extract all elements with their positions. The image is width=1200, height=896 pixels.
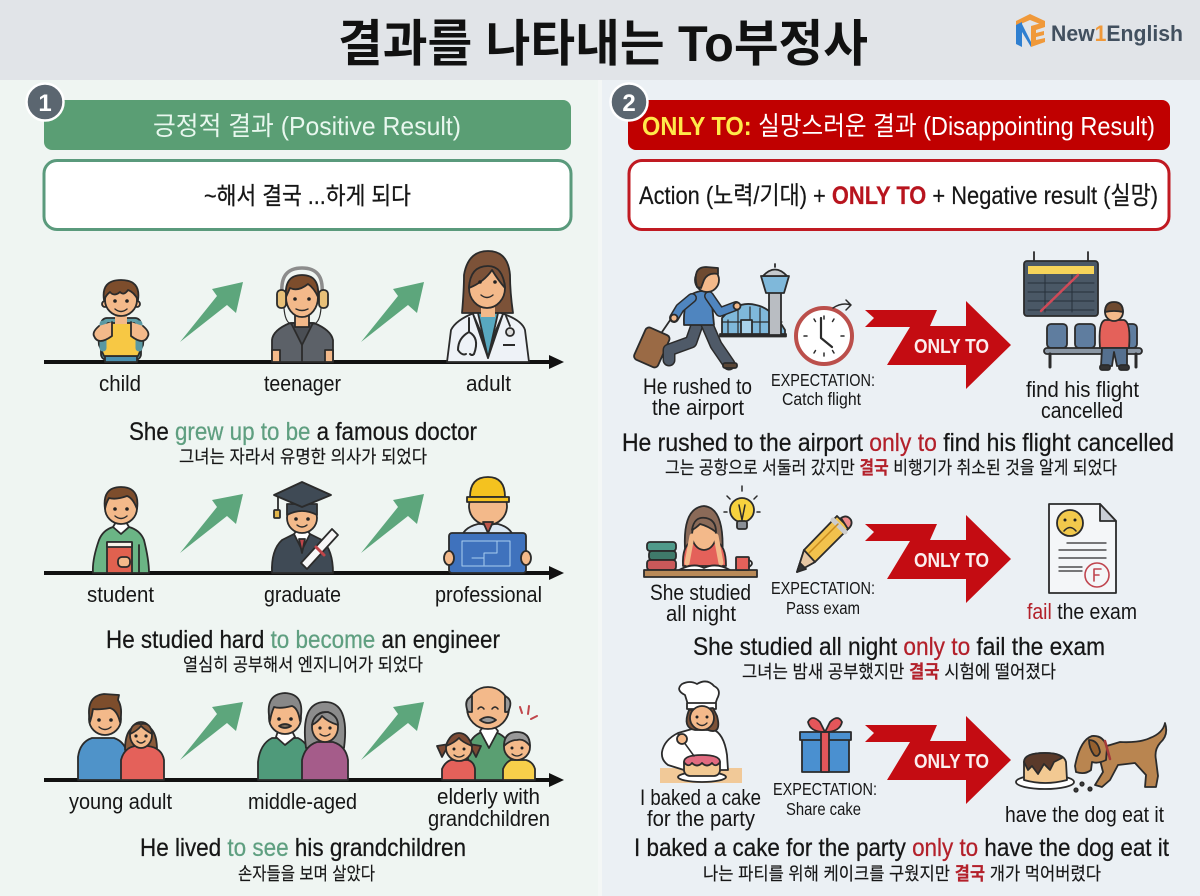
label: elderly with grandchildren [428, 784, 550, 831]
panel: positive result [26, 84, 571, 884]
expectation: pass exam [771, 578, 875, 618]
icon: young adult couple [78, 694, 164, 780]
caption: she studied all night: all night [666, 601, 736, 626]
title: 결과를 나타내는 To부정사 [338, 16, 868, 72]
red arrow: only to: ONLY TO [914, 336, 989, 358]
icon: middle-aged couple [258, 693, 348, 780]
label: adult: adult [466, 371, 511, 396]
label: elderly with grandchildren: elderly with [437, 784, 540, 809]
number badge 2: 2 [622, 90, 636, 117]
red arrow: only to [865, 515, 1011, 603]
caption: find his flight cancelled: find his flight [1026, 377, 1139, 402]
caption: find his flight cancelled: cancelled [1041, 398, 1123, 423]
korean translation 1: 그녀는 자라서 유명한 의사가 되었다 [179, 447, 427, 467]
panel: disappointing result [610, 84, 1174, 884]
caption: she studied all night [650, 580, 751, 626]
timeline 3 axis [44, 773, 564, 787]
icon: student studying at night [644, 486, 760, 577]
icon: dog eating cake [1016, 723, 1166, 792]
icon: graduate [272, 482, 338, 573]
label: elderly with grandchildren: grandchildren [428, 806, 550, 831]
timeline 1 axis [44, 355, 564, 369]
logo: New1English [1051, 21, 1183, 46]
label: student: student [87, 582, 154, 607]
label: child: child [99, 371, 141, 396]
icon: cancelled flight board and seats [1024, 252, 1142, 370]
caption: he rushed to the airport: He rushed to [643, 374, 752, 399]
expectation: catch flight: EXPECTATION: [771, 370, 875, 390]
panel heading bar: 긍정적 결과 (Positive Result) [153, 111, 461, 141]
number badge 1: 1 [38, 90, 52, 117]
label: middle-aged: middle-aged [248, 789, 357, 814]
green arrow [180, 702, 243, 760]
icon: clock [796, 300, 852, 364]
caption: i baked a cake for the party: I baked a cake [640, 785, 761, 810]
number badge 1 [26, 84, 64, 120]
caption: i baked a cake for the party: for the party [647, 806, 755, 831]
logo [1016, 14, 1183, 47]
example sentence 3: I baked a cake for the party only to have the dog eat it [634, 834, 1169, 862]
korean translation 1: 그는 공항으로 서둘러 갔지만 결국 비행기가 취소된 것을 알게 되었다 [665, 458, 1117, 478]
definition box: ~해서 결국 ...하게 되다 [204, 183, 411, 210]
caption: he rushed to the airport: the airport [652, 395, 744, 420]
green arrow [361, 282, 424, 342]
example sentence 3: He lived to see his grandchildren [140, 834, 466, 862]
caption: fail the exam: fail the exam [1027, 599, 1137, 624]
number badge 2 [610, 84, 648, 120]
icon: chef baking cake [660, 681, 742, 783]
formula box: Action (노력/기대) + ONLY TO + Negative result (실망) [639, 182, 1158, 210]
expectation: pass exam: EXPECTATION: [771, 578, 875, 598]
panel heading bar [628, 100, 1170, 150]
icon: teenager [272, 268, 333, 362]
caption: i baked a cake for the party [640, 785, 761, 831]
korean translation 2: 그녀는 밤새 공부했지만 결국 시험에 떨어졌다 [742, 662, 1056, 682]
expectation: pass exam: Pass exam [786, 598, 860, 618]
icon: elderly with grandchildren [437, 687, 537, 780]
icon: gift box [800, 718, 851, 772]
label: graduate: graduate [264, 582, 341, 607]
caption: find his flight cancelled [1026, 377, 1139, 423]
panel heading bar [44, 100, 571, 150]
red arrow: only to: ONLY TO [914, 550, 989, 572]
timeline 2 axis [44, 566, 564, 580]
formula box [629, 160, 1169, 230]
icon: pencil [797, 516, 852, 572]
icon: man running to airport [633, 264, 789, 369]
icon: engineer with blueprint [444, 477, 531, 573]
example sentence 2: She studied all night only to fail the exam [693, 633, 1105, 661]
definition box [44, 160, 571, 230]
expectation: catch flight [771, 370, 875, 409]
caption: have the dog eat it: have the dog eat it [1005, 802, 1164, 827]
korean translation 3: 나는 파티를 위해 케이크를 구웠지만 결국 개가 먹어버렸다 [703, 864, 1101, 884]
label: young adult: young adult [69, 789, 172, 814]
red arrow: only to: ONLY TO [914, 751, 989, 773]
red arrow: only to [865, 301, 1011, 389]
icon: student [93, 487, 149, 573]
caption: he rushed to the airport [643, 374, 752, 420]
example sentence 2: He studied hard to become an engineer [106, 626, 500, 654]
korean translation 3: 손자들을 보며 살았다 [238, 864, 375, 884]
icon: doctor adult [447, 251, 529, 362]
label: professional: professional [435, 582, 542, 607]
header band [0, 0, 1200, 80]
green arrow [361, 702, 424, 760]
caption: she studied all night: She studied [650, 580, 751, 605]
icon: failed exam paper [1049, 504, 1116, 593]
green arrow [180, 282, 243, 342]
expectation: share cake: EXPECTATION: [773, 779, 877, 799]
green arrow [361, 494, 424, 553]
expectation: share cake [773, 779, 877, 819]
red arrow: only to [865, 716, 1011, 804]
example sentence 1: He rushed to the airport only to find his flight cancelled [622, 429, 1174, 457]
green arrow [180, 494, 243, 553]
panel heading bar: ONLY TO: 실망스러운 결과 (Disappointing Result) [642, 111, 1155, 141]
example sentence 1: She grew up to be a famous doctor [129, 418, 477, 446]
expectation: share cake: Share cake [786, 799, 861, 819]
label: teenager: teenager [264, 371, 341, 396]
icon: child [94, 280, 148, 362]
expectation: catch flight: Catch flight [782, 389, 861, 409]
korean translation 2: 열심히 공부해서 엔지니어가 되었다 [183, 655, 423, 675]
